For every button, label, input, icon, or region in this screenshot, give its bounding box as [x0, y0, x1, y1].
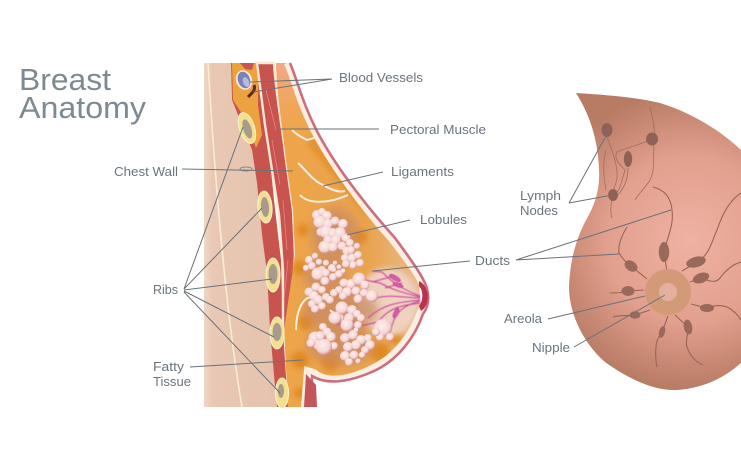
blood vessels [233, 68, 255, 97]
title: Anatomy [19, 90, 147, 125]
labels: Ribs [153, 283, 178, 297]
labels: Chest Wall [114, 165, 178, 179]
leader lines [182, 79, 671, 393]
ducts [336, 271, 420, 334]
breast tissue [276, 63, 421, 407]
labels [114, 71, 570, 389]
nipple [659, 283, 677, 301]
pectoral muscle [257, 63, 295, 330]
lobule shadow [302, 207, 378, 365]
labels: Pectoral Muscle [390, 123, 486, 137]
nipple [419, 281, 428, 311]
labels: Lymph [520, 189, 561, 203]
labels: Ducts [475, 254, 510, 268]
breast frontal view [569, 93, 741, 390]
labels: Blood Vessels [339, 71, 423, 85]
ligaments [292, 130, 348, 330]
breast skin outline [287, 63, 425, 407]
duct sacs [622, 242, 714, 339]
skin [569, 93, 741, 390]
labels: Areola [504, 312, 542, 326]
labels: Fatty [153, 360, 185, 374]
cross-section diagram [204, 63, 428, 408]
labels: Nipple [532, 341, 570, 355]
pale centre of tissue behind ducts [358, 268, 418, 336]
areola [645, 269, 691, 315]
lymph nodes [602, 123, 658, 201]
milk ducts [610, 187, 741, 367]
labels: Ligaments [391, 165, 454, 179]
lobules [303, 208, 394, 366]
title: Breast [19, 62, 111, 97]
labels: Nodes [520, 204, 558, 218]
intercostal muscle [231, 63, 288, 407]
labels: Lobules [420, 213, 467, 227]
fat shading [291, 135, 402, 399]
title [19, 62, 147, 125]
ribs [235, 110, 288, 408]
chest wall [204, 63, 277, 407]
labels: Tissue [153, 375, 191, 389]
upper fat pocket [232, 63, 262, 148]
lymph vessels [604, 106, 655, 218]
